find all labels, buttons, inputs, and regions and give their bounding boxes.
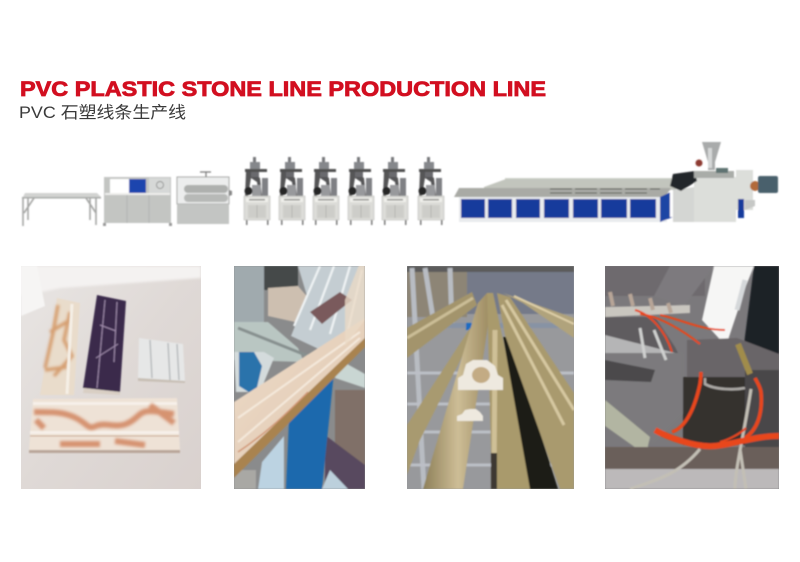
machine: forming unit 2 [279, 157, 305, 225]
photo: gold stone lines on rack [407, 266, 574, 489]
machine: haul-off with rollers [177, 172, 232, 224]
gold profile tubes [407, 292, 574, 489]
photo: stone line on haul-off machine [234, 250, 365, 489]
machine: run-out table [22, 193, 101, 226]
sample: red-veined marble moulding [29, 398, 180, 453]
white profile section large [458, 360, 503, 390]
production line machinery [22, 142, 778, 226]
drawn plank [234, 318, 365, 470]
machine: cooling cutter cabinet [103, 177, 172, 226]
photo: stone line product samples [1, 266, 201, 489]
machine: forming unit 6 [418, 157, 444, 225]
machine: forming unit 3 [313, 157, 339, 225]
sample: cream marble moulding [40, 298, 80, 395]
photo: extrusion die with orange hoses [605, 266, 779, 489]
white profile section small [457, 409, 483, 421]
machine: forming unit 4 [348, 157, 374, 225]
title: PVC PLASTIC STONE LINE PRODUCTION LINE [20, 78, 546, 101]
orange hoses [635, 310, 779, 446]
machine: extruder line [454, 142, 778, 222]
subtitle: PVC 石塑线条生产线 [19, 103, 186, 122]
sample: white marble moulding [138, 338, 185, 383]
die head [683, 338, 779, 448]
machine: forming unit 1 [244, 157, 270, 225]
sample: dark purple marble moulding [83, 295, 126, 395]
machine: forming unit 5 [382, 157, 408, 225]
